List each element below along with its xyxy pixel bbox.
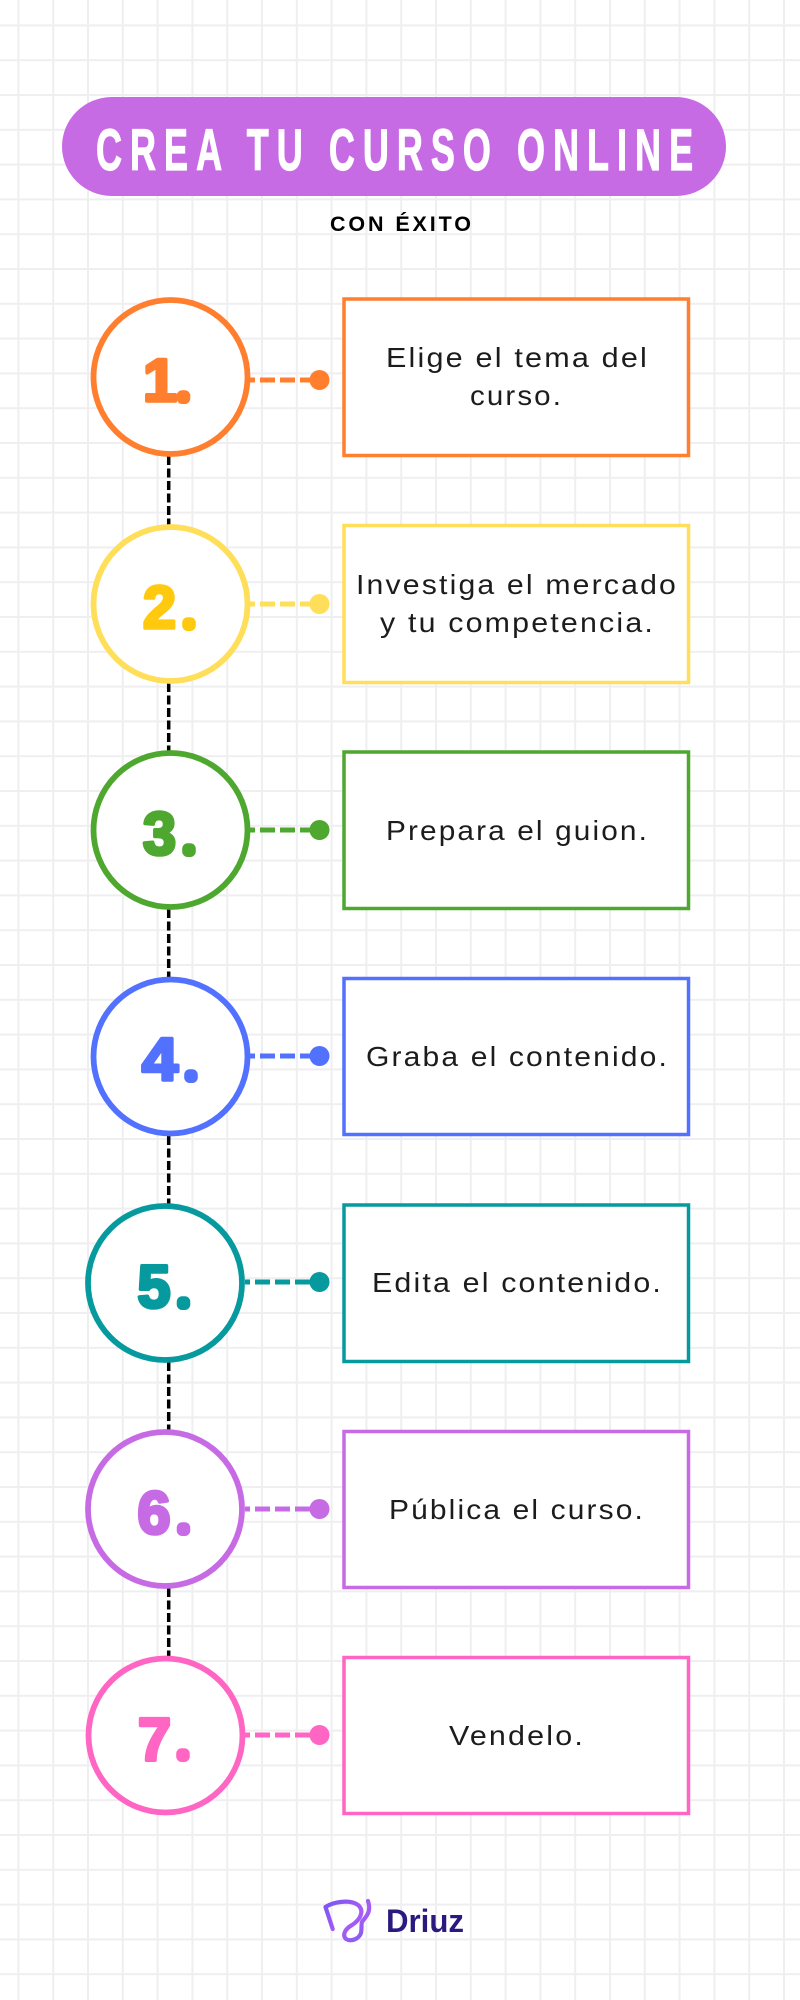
step 3 box: Prepara el guion. (386, 815, 649, 846)
step 7 box (344, 1658, 688, 1814)
step 6 box: Pública el curso. (389, 1494, 645, 1525)
step 6 circle (88, 1432, 242, 1586)
step 2 connector (250, 594, 330, 614)
step 1 circle: 1 (143, 347, 177, 414)
step 1 circle: . (181, 382, 186, 402)
logo: Driuz (326, 1901, 464, 1940)
step 6 (88, 1432, 688, 1588)
wordmark: Driuz (386, 1903, 464, 1939)
step 7 circle: . (180, 1740, 186, 1760)
step 7 box: Vendelo. (449, 1720, 585, 1751)
step 4 connector (250, 1046, 330, 1066)
step 3 circle: . (186, 836, 192, 856)
step 1 box: curso. (470, 380, 563, 411)
step 2 box: y tu competencia. (380, 607, 655, 638)
step 1 connector (250, 370, 330, 390)
step 4 circle (94, 980, 248, 1134)
step 2 box: Investiga el mercado (356, 569, 678, 600)
step 1 box: Elige el tema del (386, 342, 649, 373)
step 6 circle: 6 (138, 1480, 170, 1546)
step 3 circle (94, 753, 248, 907)
step 5 circle: 5 (138, 1254, 170, 1320)
title banner (62, 97, 726, 196)
step 2 circle: . (186, 610, 192, 630)
step 2 circle (94, 527, 248, 681)
step 7 (88, 1658, 688, 1814)
step 3 (94, 752, 688, 908)
step 5 circle: . (181, 1288, 186, 1308)
step 1 box (344, 299, 688, 456)
step 6 box (344, 1432, 688, 1588)
step 3 circle: 3 (143, 800, 176, 868)
step 4 box: Graba el contenido. (366, 1041, 669, 1072)
step 2 (94, 526, 688, 682)
step 6 connector (245, 1499, 330, 1519)
icon: Driuz mark (326, 1901, 369, 1940)
step 3 connector (250, 820, 330, 840)
step 5 (88, 1205, 688, 1362)
vertical dashed connector between the step circles (167, 456, 170, 1657)
step 6 circle: . (181, 1514, 186, 1534)
step 4 circle: 4 (142, 1026, 179, 1093)
step 4 box (344, 978, 688, 1134)
step 3 box (344, 752, 688, 908)
step 5 box: Edita el contenido. (372, 1267, 663, 1298)
subtitle: CON ÉXITO (330, 211, 471, 236)
step 1 (94, 299, 688, 456)
step 1 circle (94, 300, 248, 454)
title: CREA TU CURSO ONLINE (96, 118, 693, 183)
step 5 box (344, 1205, 688, 1362)
step 7 circle (88, 1658, 242, 1812)
step 2 box (344, 526, 688, 682)
step 7 circle: 7 (138, 1706, 171, 1773)
step 4 circle: . (188, 1062, 194, 1082)
step 5 circle (88, 1206, 242, 1360)
step 5 connector (245, 1272, 330, 1292)
step 2 circle: 2 (143, 574, 176, 641)
step 7 connector (245, 1725, 330, 1745)
step 4 (94, 978, 688, 1134)
